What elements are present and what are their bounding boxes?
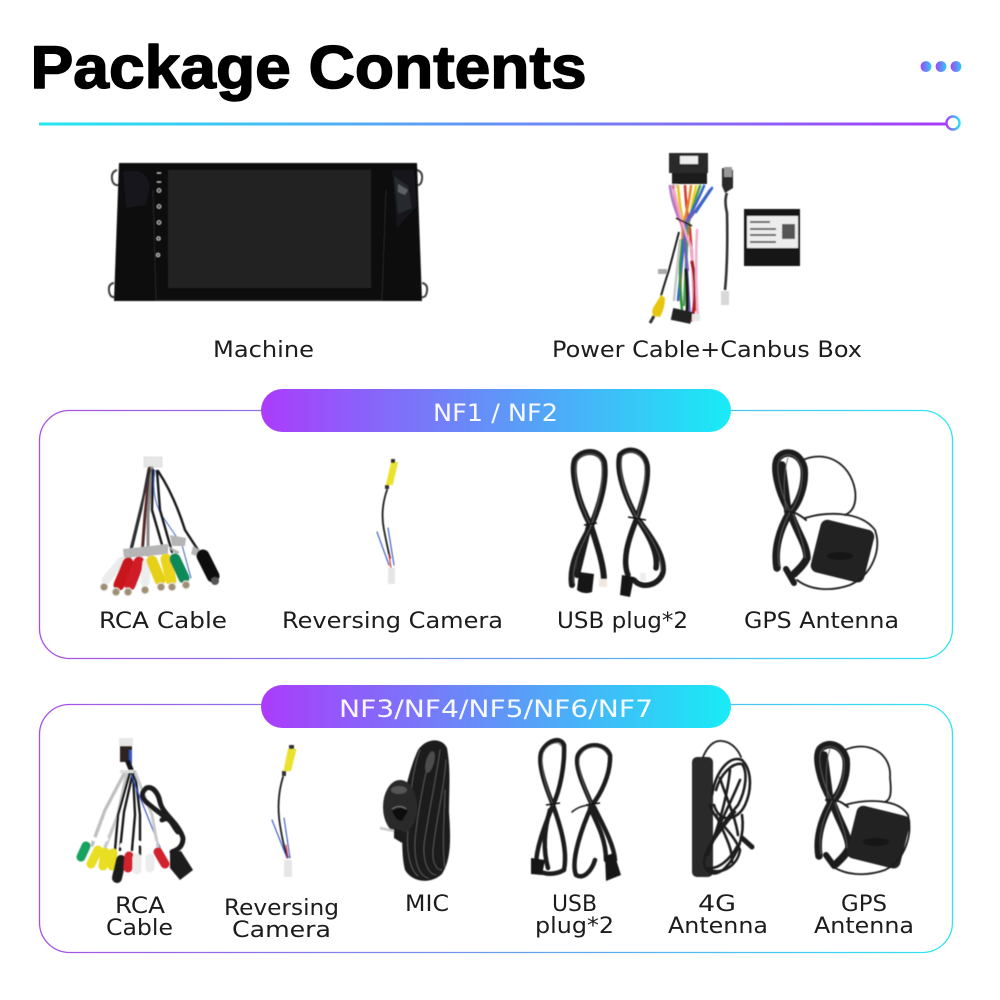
product: power cable harness: [650, 153, 733, 324]
product: RCA cable: [100, 457, 219, 596]
label: GPS Antenna: GPS Antenna: [744, 609, 899, 634]
product: 4G antenna: [692, 741, 752, 877]
product: USB plug pair: [571, 450, 663, 597]
panel outline: [40, 410, 952, 658]
product: machine head unit: [109, 163, 427, 301]
label: Machine: Machine: [213, 338, 314, 363]
decoration: three dots: [921, 61, 961, 72]
label: Reversing Camera: Reversing Camera: [282, 609, 503, 634]
product: GPS antenna: [776, 453, 877, 589]
product: USB plug pair: [531, 740, 621, 881]
product: canbus box: [744, 209, 800, 266]
label: RCA Cable (stacked): Cable: [106, 916, 173, 941]
label: RCA Cable: RCA Cable: [99, 609, 227, 634]
panel outline: [40, 704, 952, 952]
label: RCA Cable (stacked): [106, 894, 173, 941]
product: reversing camera cable: [377, 459, 397, 584]
product: MIC: [380, 740, 450, 881]
product: reversing camera cable: [272, 745, 295, 877]
label: USB plug*2: USB plug*2: [557, 609, 688, 634]
label: Power Cable+Canbus Box: Power Cable+Canbus Box: [552, 338, 862, 363]
label: Reversing Camera (stacked): Camera: [232, 918, 331, 943]
label: GPS Antenna (stacked): [814, 892, 914, 939]
label: GPS Antenna (stacked): GPS: [841, 892, 887, 917]
label: USB plug*2 (stacked): plug*2: [535, 914, 614, 939]
label: 4G Antenna (stacked): [668, 892, 768, 939]
pill text: NF3/NF4/NF5/NF6/NF7: [339, 695, 653, 723]
header gradient rule with ring end: [39, 116, 960, 130]
pill heading: [261, 389, 731, 432]
panel: NF1 / NF2: [40, 389, 952, 658]
label: MIC: MIC: [405, 892, 449, 917]
label: USB plug*2 (stacked): USB: [552, 892, 597, 917]
pill text: NF1 / NF2: [433, 399, 558, 427]
label: RCA Cable (stacked): RCA: [115, 894, 165, 919]
pill heading: [261, 685, 731, 728]
label: Reversing Camera (stacked): [224, 896, 339, 943]
title: Package Contents: [30, 34, 586, 101]
product: RCA cable with USB: [81, 738, 193, 880]
panel: NF3/NF4/NF5/NF6/NF7: [40, 685, 952, 952]
label: USB plug*2 (stacked): [535, 892, 614, 939]
label: 4G Antenna (stacked): Antenna: [668, 914, 768, 939]
product: GPS antenna: [818, 745, 912, 874]
label: GPS Antenna (stacked): Antenna: [814, 914, 914, 939]
label: 4G Antenna (stacked): 4G: [698, 892, 736, 917]
label: Reversing Camera (stacked): Reversing: [224, 896, 339, 921]
